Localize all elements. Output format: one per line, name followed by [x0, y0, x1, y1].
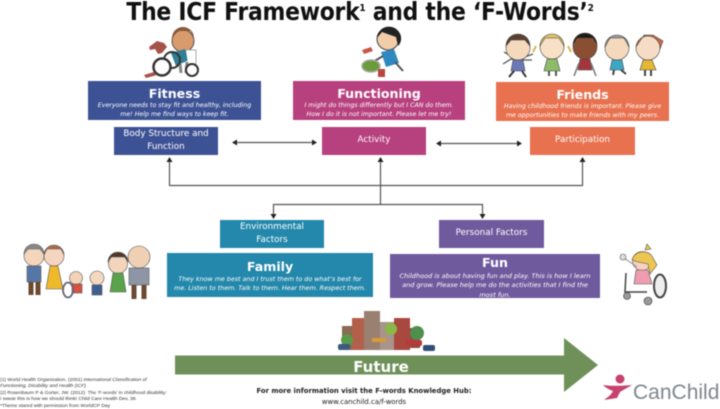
panel: Functioning: Functioning: [337, 86, 421, 101]
more information text: www.canchild.ca/f-words: [322, 398, 406, 406]
box: Environmental Factors: [220, 220, 324, 248]
box: Activity: [322, 127, 426, 155]
more information text: [256, 386, 472, 406]
references: Functioning, Disability and Health (ICF): [0, 384, 86, 389]
panel: Family: me. Listen to them. Talk to them. Hear them. Respect them.: [174, 285, 366, 292]
panel: Friends: Having childhood friends is important. Please give: [504, 103, 661, 110]
panel: Friends: Friends: [556, 87, 609, 102]
references: I swear this is how we should think! Child Care Health Dev, 38.: [0, 397, 137, 402]
panel: Fitness: me! Help me find ways to keep fit.: [120, 110, 229, 118]
panel: Friends: me opportunities to make friends with my peers.: [506, 112, 659, 118]
panel: Fun: Childhood is about having fun and play. This is how I learn: [399, 272, 591, 280]
panel: Family: They know me best and I trust them to do what’s best for: [178, 276, 362, 283]
box: Participation: Participation: [555, 135, 610, 145]
panel: Fun: [390, 254, 600, 298]
box: Participation: [530, 127, 635, 155]
panel: Functioning: I might do things differently but I CAN do them.: [304, 102, 454, 109]
logo: CanChild: CanChild: [633, 381, 719, 404]
box: Personal Factors: Personal Factors: [456, 228, 527, 238]
panel: Family: Family: [247, 259, 293, 274]
box: Environmental Factors: Factors: [256, 235, 288, 245]
panel: Fun: and grow. Please help me do the activities that I find the: [402, 281, 588, 289]
panel: Friends: [496, 82, 669, 121]
panel: Fitness: Everyone needs to stay fit and healthy, including: [98, 102, 251, 109]
more information text: For more information visit the F-words Knowledge Hub:: [256, 387, 472, 395]
arrow: Future: Future: [353, 358, 409, 376]
box: Activity: Activity: [358, 135, 390, 145]
panel: Fitness: Fitness: [149, 86, 200, 101]
box: Body Structure and Function: Body Structure and: [123, 128, 209, 138]
box: Environmental Factors: Environmental: [240, 222, 304, 232]
panel: Functioning: How I do it is not important. Please let me try!: [307, 110, 451, 118]
box: Personal Factors: [439, 220, 544, 248]
references: [0, 377, 167, 409]
panel: Fun: Fun: [482, 255, 508, 270]
panel: Fitness: [88, 81, 261, 120]
references: (1) World Health Organization. (2001) International Classification of: [0, 378, 147, 383]
references: (2) Rosenbaum P & Gorter, JW. (2012). The ‘F-words’ in childhood disability:: [0, 391, 167, 396]
panel: Functioning: [293, 81, 465, 120]
references: *Theme stared with permission from WorldCP Day: [0, 404, 110, 409]
panel: Family: [167, 253, 373, 297]
box: Body Structure and Function: Function: [147, 142, 185, 152]
box: Body Structure and Function: [114, 127, 218, 155]
